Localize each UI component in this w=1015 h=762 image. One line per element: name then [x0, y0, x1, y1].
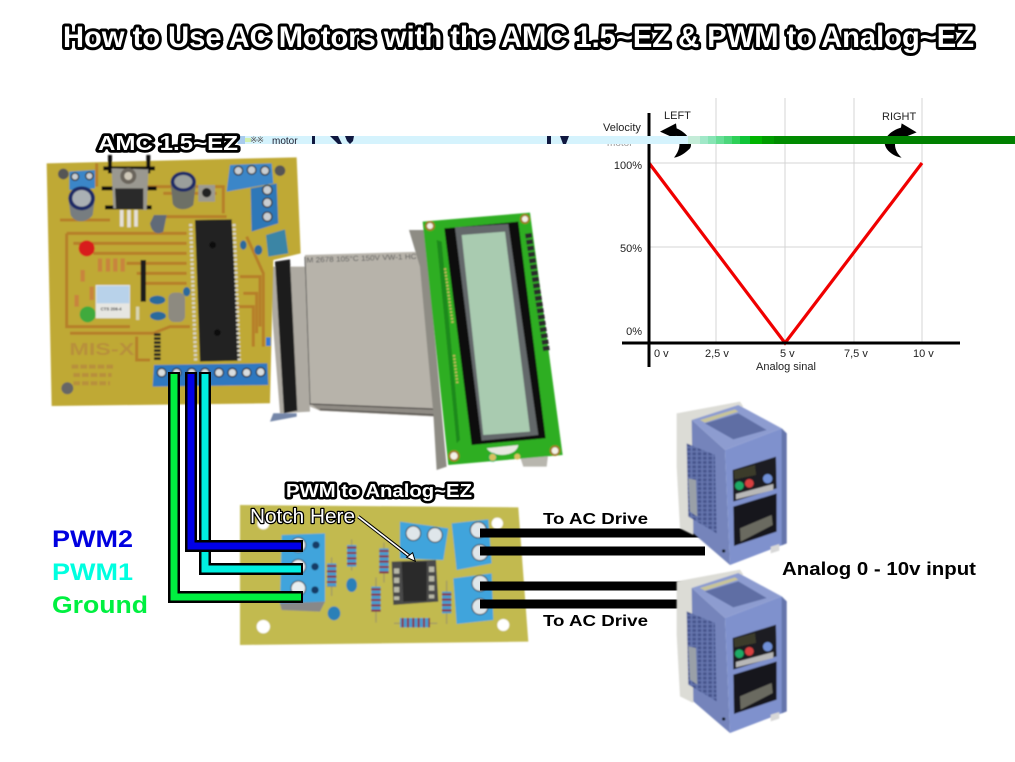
LCD module	[409, 213, 563, 470]
banner strip	[237, 135, 1015, 147]
axis labels: 0%	[626, 326, 642, 338]
trimmer	[266, 229, 288, 257]
mounting holes	[426, 215, 559, 461]
legend: wire colours	[52, 526, 148, 619]
coloured PWM and ground wires	[174, 372, 303, 597]
capacitors	[68, 190, 95, 221]
axis labels: Velocity	[603, 122, 641, 134]
axis labels: 2,5 v	[705, 348, 729, 360]
ceramic capacitors	[346, 578, 357, 592]
header pins	[528, 233, 547, 352]
corner screws	[58, 169, 69, 179]
AC drive 1	[677, 402, 787, 565]
ribbon printing: M 2678 105°C 150V VW-1 HCT	[306, 252, 422, 265]
legend: wire colours: PWM1	[52, 559, 133, 586]
DIP switch	[96, 285, 130, 318]
PCB	[240, 505, 528, 645]
legend: wire colours: Ground	[52, 592, 148, 619]
LEDs	[79, 240, 95, 256]
axis labels: 50%	[620, 243, 642, 255]
red V curve	[649, 163, 922, 343]
power terminal block	[400, 522, 448, 560]
icon: left arrow	[660, 123, 691, 158]
to AC drive label top: To AC Drive	[543, 511, 648, 528]
traces	[60, 163, 263, 360]
analog input label: Analog 0 - 10v input	[782, 559, 976, 579]
input terminal block	[280, 533, 325, 605]
microcontroller	[195, 219, 240, 362]
to AC drive label bottom: To AC Drive	[543, 613, 648, 630]
ribbon cable and connector	[268, 252, 440, 422]
resistors	[77, 258, 123, 307]
axis labels: RIGHT	[882, 111, 916, 123]
notch text: Notch Here	[250, 506, 355, 528]
IC socket and chip	[392, 560, 438, 605]
banner strip: motor	[272, 136, 298, 147]
black frame	[444, 222, 546, 445]
AMC 1.5~EZ board	[47, 155, 301, 406]
voltage regulator	[102, 155, 157, 207]
PWM to Analog~EZ label: PWM to Analog~EZ	[286, 481, 472, 501]
axis labels: 7,5 v	[844, 348, 868, 360]
mounting holes	[257, 517, 509, 633]
bottom terminal strip	[153, 363, 268, 387]
legend: wire colours: PWM2	[52, 526, 133, 553]
notch label and pointer	[250, 506, 415, 561]
axis labels: 5 v	[780, 348, 795, 360]
axis labels: Analog sinal	[756, 361, 816, 373]
title: How to Use AC Motors with the AMC 1.5~EZ & PWM to Analog~EZ	[63, 21, 974, 54]
axis labels: 0 v	[654, 348, 669, 360]
AMC 1.5~EZ label: AMC 1.5~EZ	[98, 133, 238, 155]
terminal blocks	[69, 170, 95, 190]
icon: right arrow	[885, 123, 917, 158]
axis labels	[603, 110, 934, 373]
AC drive 2	[677, 570, 787, 733]
metal bracket	[409, 230, 447, 470]
crystal and small caps	[168, 293, 185, 322]
grid lines	[649, 98, 922, 343]
axis labels: 10 v	[913, 348, 934, 360]
axis labels: motor	[607, 138, 633, 149]
pin headers	[135, 260, 151, 302]
notch pointer arrow	[358, 517, 415, 561]
chart: velocity vs analog signal	[603, 98, 960, 373]
axis labels: 100%	[614, 160, 642, 172]
PCB	[47, 157, 301, 406]
resistors	[332, 539, 447, 624]
black output wires	[480, 533, 705, 604]
axes	[622, 113, 960, 367]
AMC 1.5~EZ board: CTS 206-4	[101, 307, 122, 312]
push button	[198, 185, 215, 202]
axis labels: LEFT	[664, 110, 691, 122]
display glass	[462, 232, 530, 435]
green PCB	[423, 213, 563, 465]
banner strip: ※※	[250, 135, 264, 145]
mirrored silkscreen: MIS-X	[69, 339, 134, 359]
PWM to Analog~EZ board	[240, 505, 528, 645]
output terminal blocks	[452, 519, 492, 570]
